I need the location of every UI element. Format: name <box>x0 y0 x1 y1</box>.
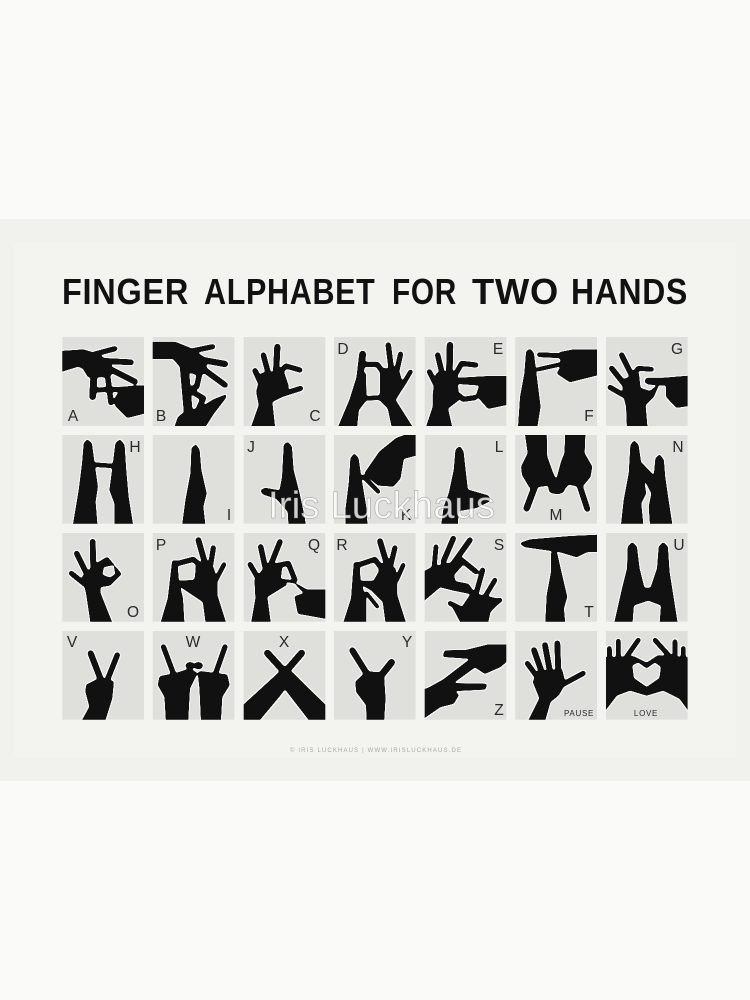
tile: PAUSE: PAUSE <box>564 709 594 718</box>
tile: X: X <box>279 634 290 651</box>
tile: R: R <box>336 537 348 554</box>
tile: H <box>62 435 144 530</box>
tile: V: V <box>67 634 78 651</box>
tile: W <box>153 631 234 725</box>
footer credit: © IRIS LUCKHAUS | WWW.IRISLUCKHAUS.DE <box>290 747 461 754</box>
poster background <box>0 219 750 781</box>
tile: L <box>425 435 506 530</box>
title: HANDS <box>571 271 688 312</box>
tile: F: F <box>584 408 594 425</box>
tile: S: S <box>494 537 504 554</box>
tile: P <box>153 533 234 627</box>
tile: N: N <box>672 439 684 456</box>
tile: P: P <box>156 537 166 554</box>
tile: E <box>425 337 512 432</box>
tile: B: B <box>156 408 166 425</box>
tile: U <box>606 533 688 627</box>
tile: R <box>334 533 416 627</box>
tile: Z: Z <box>494 702 504 719</box>
tile: A <box>55 337 150 426</box>
tile: X <box>238 631 330 725</box>
tile: LOVE: LOVE <box>634 709 658 718</box>
tile: D <box>334 337 416 432</box>
title: FINGER <box>62 271 189 312</box>
tile: T: T <box>584 604 594 621</box>
tile: J: J <box>247 439 255 456</box>
tile: U: U <box>673 537 685 554</box>
tile: F <box>515 337 603 432</box>
tile: C: C <box>309 408 321 425</box>
tile: Y <box>334 631 416 725</box>
tile: B <box>145 337 234 432</box>
tile: C <box>244 337 325 432</box>
tile: Y: Y <box>402 634 412 651</box>
tile: T <box>515 533 603 627</box>
tile: N <box>606 435 688 530</box>
watermark: Iris Luckhaus <box>268 485 495 527</box>
title: FOR <box>392 271 457 312</box>
tile: S <box>418 533 506 627</box>
tile: D: D <box>337 341 349 358</box>
tile: G <box>606 337 692 432</box>
tile: Q: Q <box>308 537 320 554</box>
title <box>62 271 688 312</box>
tile: G: G <box>671 341 683 358</box>
title: TWO <box>472 271 559 312</box>
tile: A: A <box>68 408 79 425</box>
tile: I <box>153 435 234 530</box>
tile: J <box>244 435 325 530</box>
tile: Q <box>244 533 330 627</box>
title: ALPHABET <box>204 271 376 312</box>
tile: Z <box>418 631 512 722</box>
tile: M <box>515 430 597 524</box>
tile: I: I <box>227 507 231 524</box>
tile: O <box>62 533 144 627</box>
tile: W: W <box>186 634 201 651</box>
tile: O: O <box>127 604 139 621</box>
tile: V <box>62 631 144 725</box>
tile: PAUSE <box>515 631 597 725</box>
tile: M: M <box>550 507 562 524</box>
tile: K: K <box>401 507 412 524</box>
tile: K <box>334 430 420 530</box>
tile: E: E <box>493 341 503 358</box>
tile: LOVE <box>600 631 693 720</box>
tile: H: H <box>129 439 141 456</box>
tile: L: L <box>495 439 504 456</box>
